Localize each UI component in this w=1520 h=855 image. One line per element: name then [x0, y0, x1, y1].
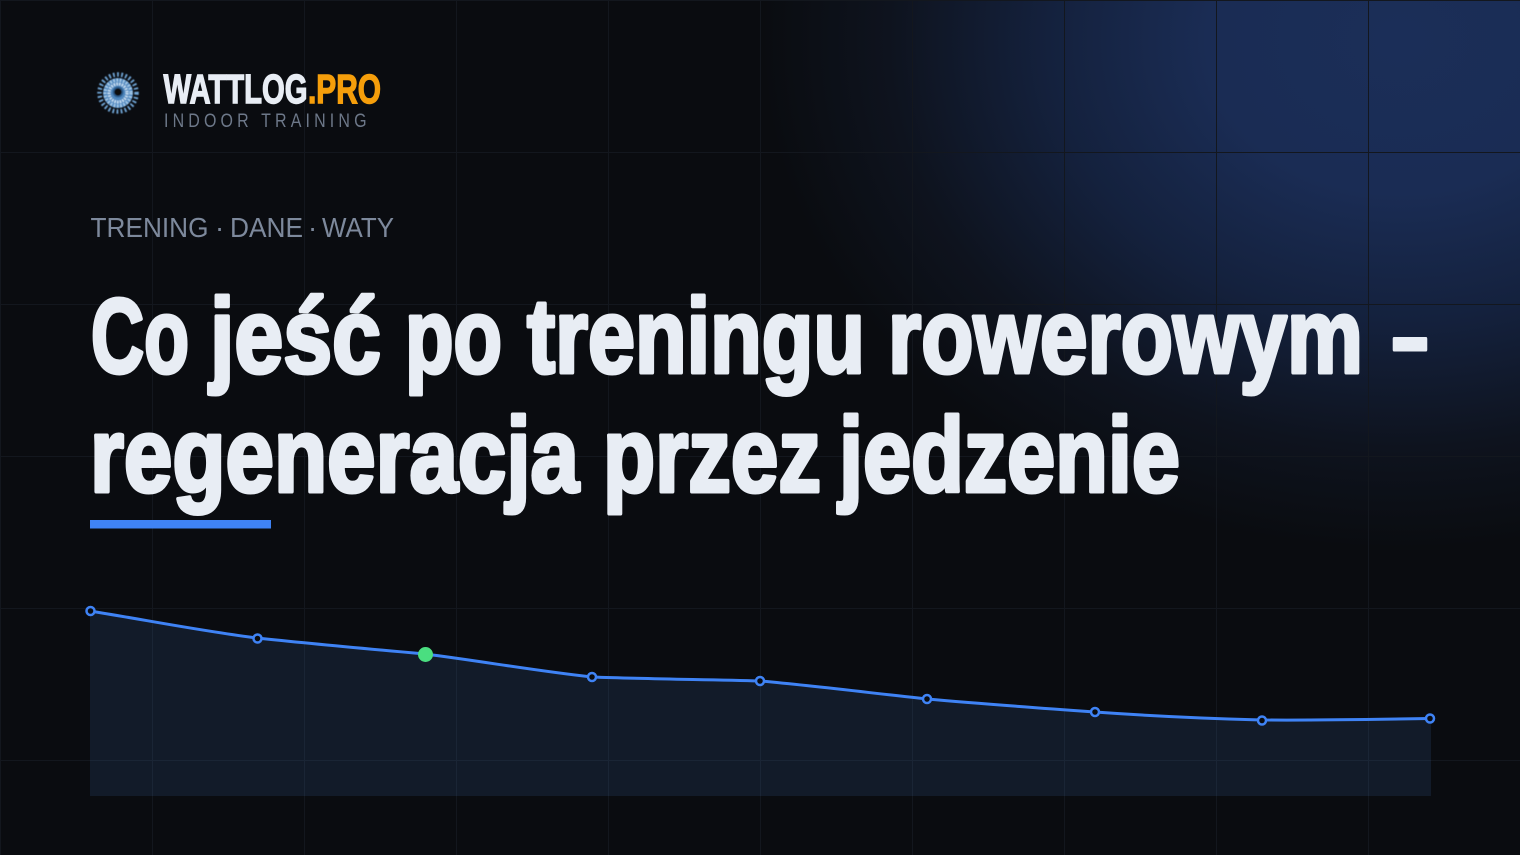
chart area fill	[90, 611, 1431, 796]
title line 2: jedzenie	[837, 396, 1180, 514]
title line 1: po	[405, 278, 502, 396]
title line 1: treningu	[527, 278, 865, 396]
line chart	[86, 607, 1434, 796]
logo wordmark: WATTLOG	[164, 66, 308, 112]
title line 1: Co	[91, 278, 189, 396]
title underline accent	[90, 520, 271, 528]
title line 1	[91, 278, 1428, 396]
logo wordmark: .PRO	[308, 66, 381, 112]
highlighted data point	[418, 647, 433, 662]
eyebrow text: WATY	[322, 212, 394, 243]
title	[90, 278, 1428, 514]
eyebrow text	[90, 212, 394, 243]
eyebrow text: ·	[308, 212, 317, 243]
title line 2: przez	[603, 396, 821, 514]
title line 1: jeść	[208, 278, 381, 396]
logo	[100, 66, 381, 131]
title line 2	[90, 396, 1180, 514]
chart line	[90, 611, 1430, 720]
eyebrow text: DANE	[230, 212, 303, 243]
title line 2: regeneracja	[90, 396, 580, 514]
eyebrow text: ·	[215, 212, 224, 243]
title line 1: –	[1392, 278, 1428, 396]
logo tagline: INDOOR TRAINING	[164, 110, 367, 131]
chart data points	[86, 607, 1434, 724]
title line 1: rowerowym	[888, 278, 1363, 396]
icon: cassette cog	[100, 74, 136, 112]
eyebrow text: TRENING	[90, 212, 208, 243]
